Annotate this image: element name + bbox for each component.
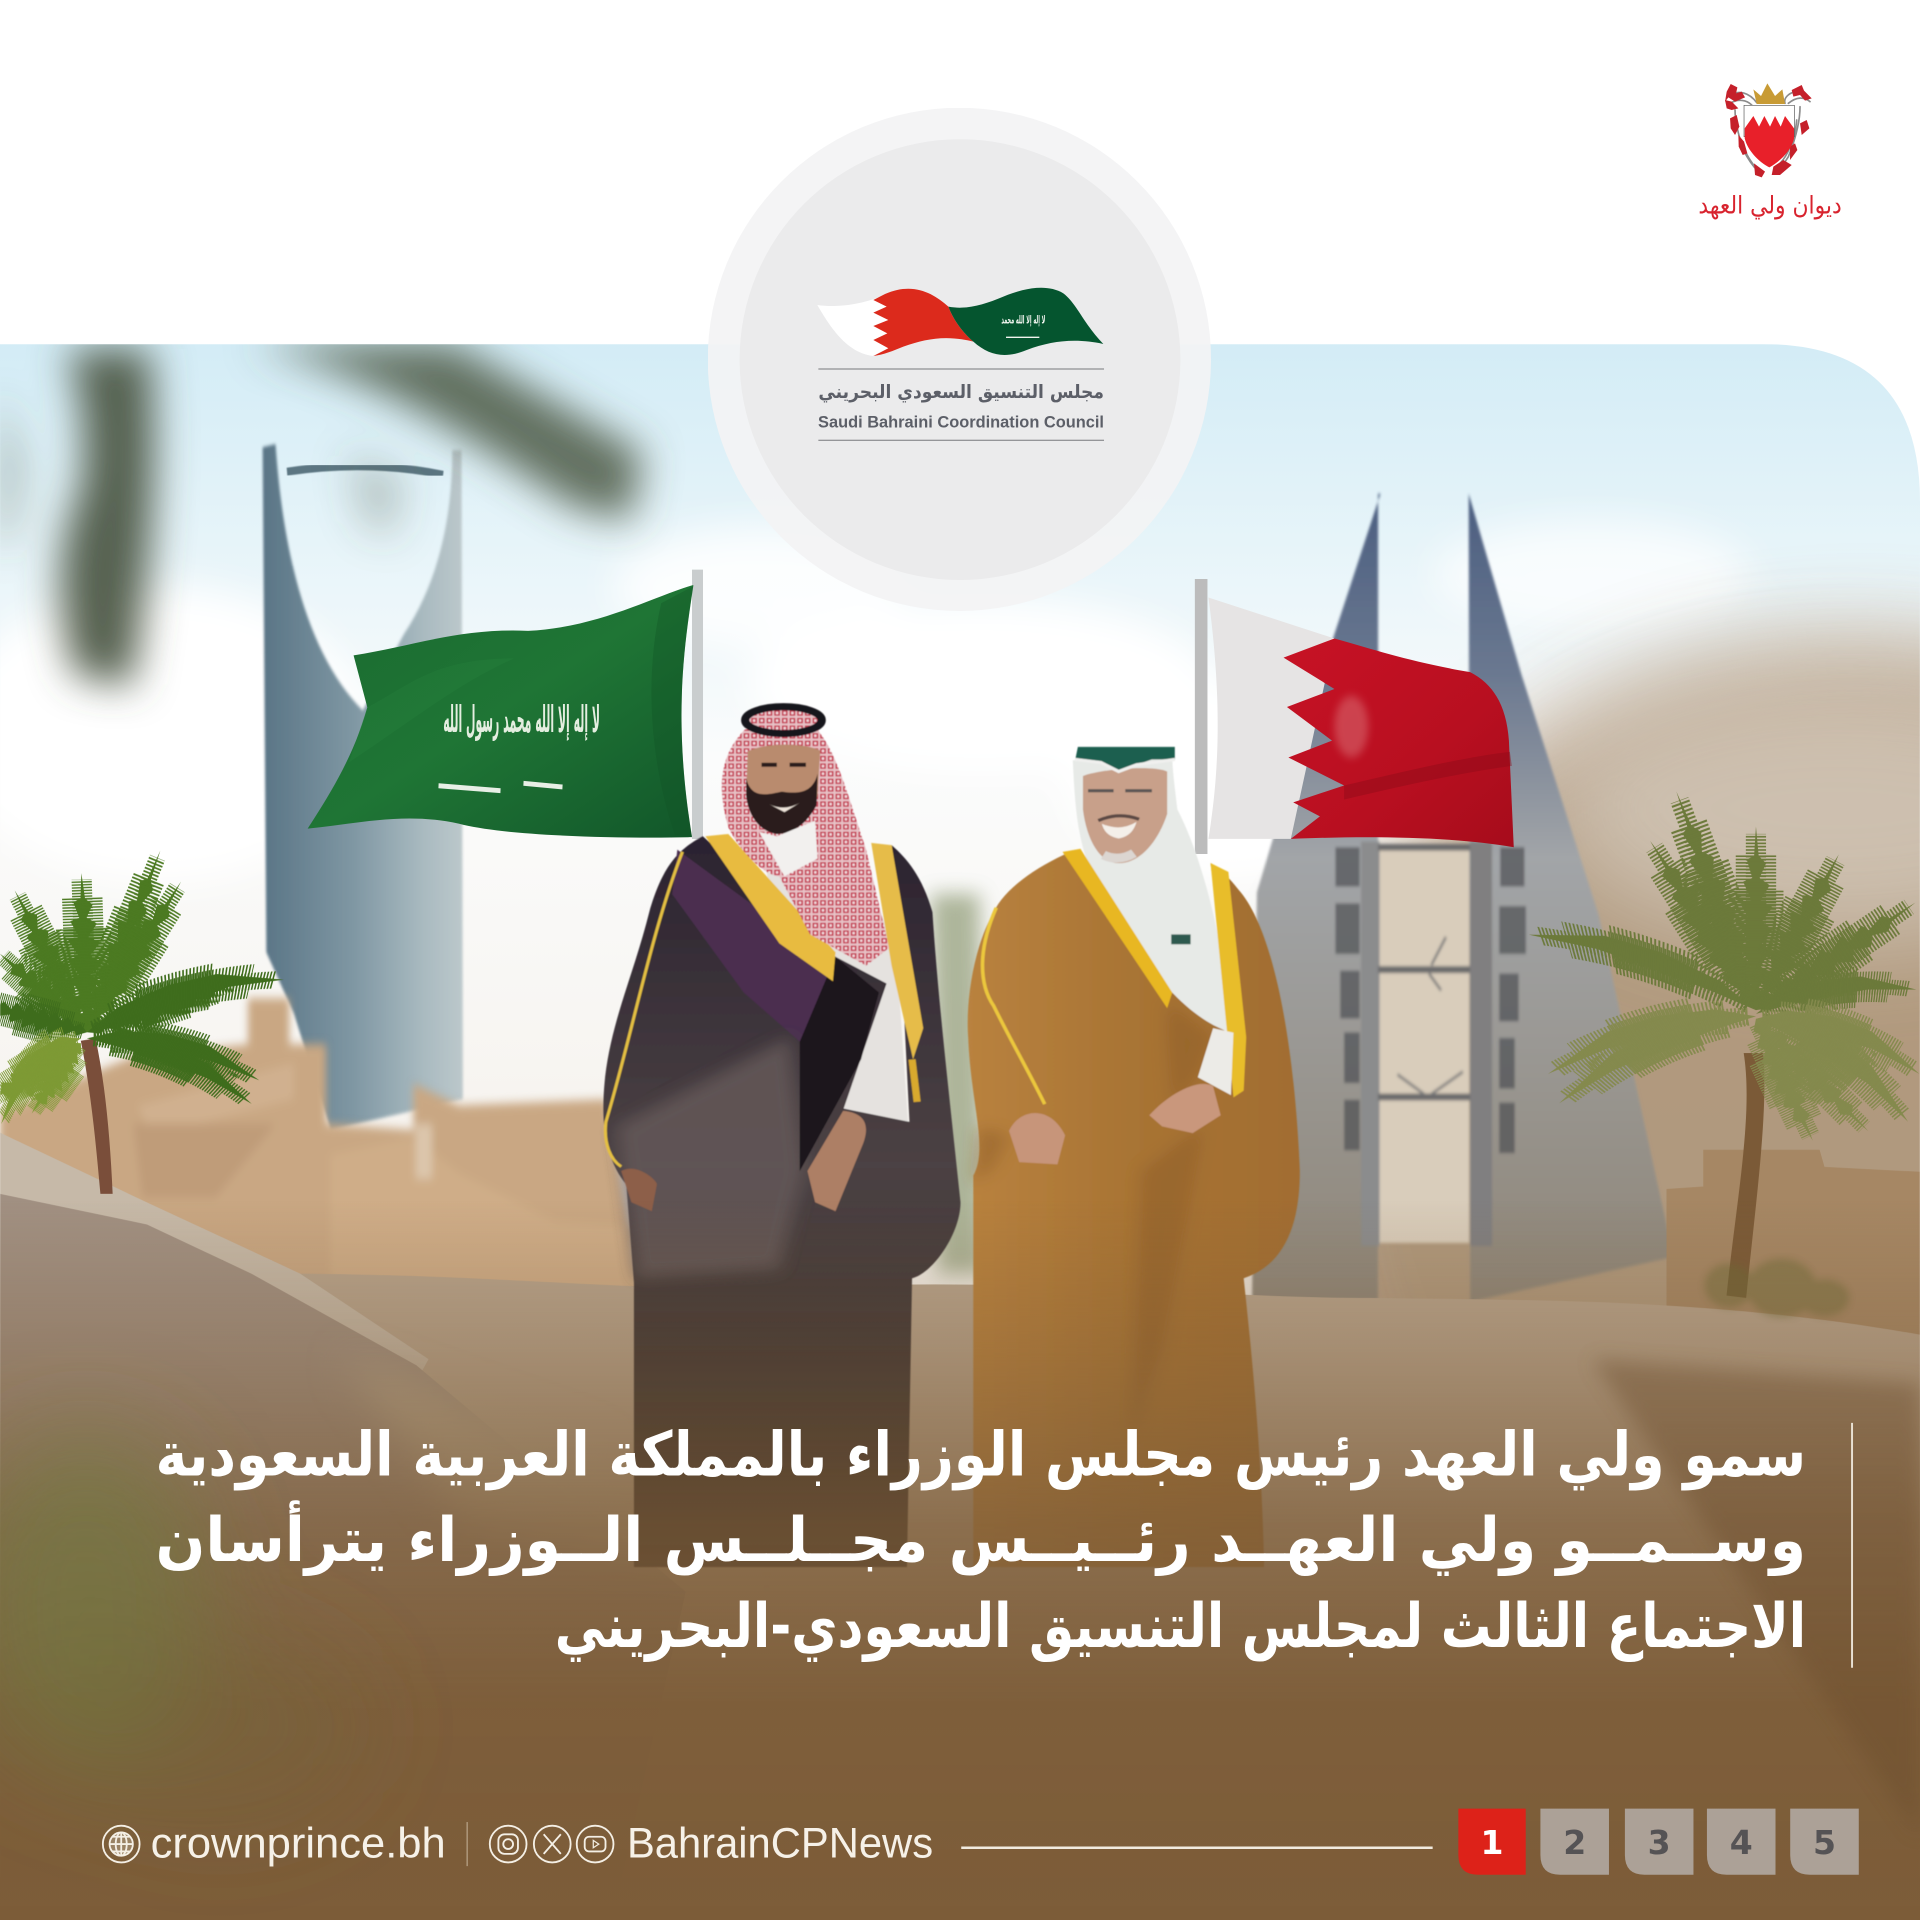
white headdress (1073, 756, 1231, 1033)
mantling: grey scrollwork (1728, 92, 1810, 173)
hazy sand sky on the right (1244, 578, 1920, 1306)
face (746, 745, 820, 834)
icon: instagram (490, 1826, 527, 1862)
Saudi flag (308, 570, 703, 839)
lighter cloak sheen (616, 1037, 805, 1278)
blurred grass, bottom left (0, 1433, 367, 1824)
logo circle: outer ring (708, 108, 1211, 611)
Bahrain World Trade Center towers (1252, 494, 1674, 1302)
beard and smile (1102, 822, 1137, 838)
headline side rule (1851, 1423, 1853, 1668)
gold trim (705, 834, 835, 981)
man: Saudi Crown Prince in black and gold bisht (603, 707, 961, 1567)
gold trim (1063, 849, 1172, 1008)
green cap (1075, 747, 1175, 771)
agal (745, 707, 822, 734)
page 1 active: 1 (1481, 1823, 1504, 1862)
waving flag: green (948, 288, 1103, 355)
divider (466, 1822, 468, 1866)
page 3 (1625, 1809, 1693, 1875)
page 4: 4 (1730, 1823, 1753, 1862)
page 5: 5 (1813, 1823, 1836, 1862)
website text: crownprince.bh (151, 1820, 446, 1868)
Bahraini fort wall (1667, 1150, 1920, 1335)
man: Bahraini Crown Prince in golden-brown bisht (968, 747, 1300, 1567)
face (1083, 768, 1167, 863)
darker diagonal band, lower right (1592, 1359, 1920, 1837)
headline line 2: وســمــو ولي العهــد رئــيــس مجــلــس الــوزراء يترأسان (156, 1500, 1806, 1576)
icon: youtube (577, 1826, 613, 1862)
footer: website and social handles (103, 1820, 933, 1868)
shield red (1745, 116, 1794, 167)
palm tree, right (1529, 786, 1920, 1318)
palm tree, left (0, 846, 284, 1194)
fold shadows (973, 1001, 1211, 1439)
logo rules (818, 369, 1104, 440)
dark inner fold (800, 957, 879, 1171)
waving flag: white (817, 294, 888, 356)
Kingdom Centre tower, Riyadh (263, 444, 463, 1130)
icon: X (534, 1826, 571, 1862)
logo English name: Saudi Bahraini Coordination Council (818, 412, 1104, 431)
blurred palm behind the two men (931, 894, 986, 1273)
logo Arabic name: مجلس التنسيق السعودي البحريني (818, 382, 1104, 404)
Diriyah mud-brick buildings (0, 998, 643, 1300)
clouds (0, 518, 1740, 714)
pen in pocket (1171, 934, 1191, 944)
emblem: Bahrain coat of arms and Crown Prince Court wordmark (1698, 83, 1842, 219)
bisht (968, 852, 1300, 1567)
purple panel (672, 850, 835, 1042)
footer rule (961, 1847, 1433, 1849)
keffiyeh (722, 708, 889, 966)
hands (1009, 1113, 1065, 1164)
icon: globe (103, 1826, 140, 1862)
page 2 (1540, 1809, 1609, 1875)
logo: Saudi Bahraini Coordination Council: لا إله إلا الله محمد (1001, 312, 1045, 326)
Bahrain flag (1195, 579, 1514, 854)
wordmark: ديوان ولي العهد (1698, 190, 1842, 219)
blurred palm fronds foreground, top-left (0, 344, 643, 686)
brown fade over the lower scene (0, 1200, 1920, 1920)
hands (621, 1169, 657, 1211)
page 1 active (1458, 1809, 1526, 1875)
white thobe (759, 814, 908, 1122)
page 3: 3 (1648, 1823, 1671, 1862)
pagination (1458, 1809, 1859, 1875)
page 2: 2 (1563, 1823, 1586, 1862)
headline (156, 1420, 1806, 1662)
social handle text: BahrainCPNews (627, 1820, 933, 1868)
flag sword (1006, 335, 1039, 339)
crown (1753, 83, 1785, 104)
sky (0, 344, 1920, 1324)
logo: Saudi Bahraini Coordination Council (817, 288, 1104, 440)
shield white (1744, 105, 1794, 137)
sand dunes (0, 1132, 1920, 1674)
logo circle: inner disc (740, 139, 1180, 580)
panel: photo scene with rounded top-right corner: لا إله إلا الله محمد رسول الله (443, 698, 600, 741)
cuff (1198, 1028, 1233, 1095)
collar (759, 821, 818, 876)
mantling: red leaves (1725, 84, 1812, 177)
waving flag: red (873, 289, 973, 356)
page 4 (1707, 1809, 1776, 1875)
black cloak (603, 836, 961, 1567)
beard (746, 774, 818, 834)
page 5 (1790, 1809, 1859, 1875)
